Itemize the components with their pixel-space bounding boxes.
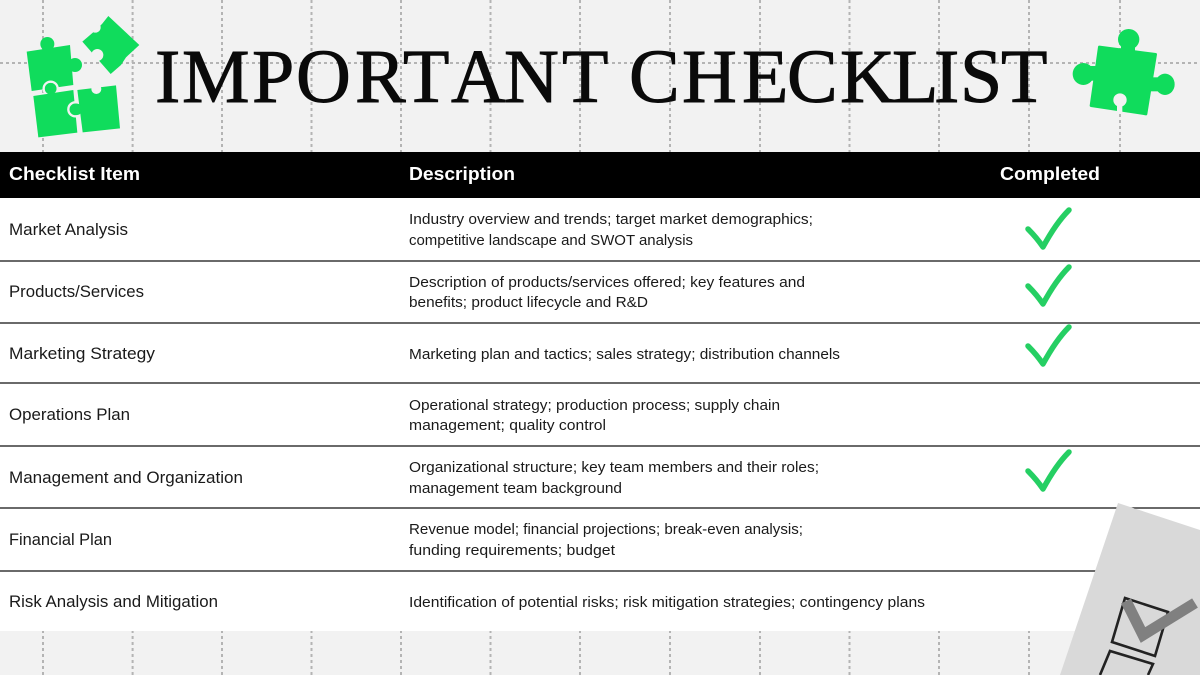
table header	[0, 152, 1200, 198]
grey check mark	[1126, 601, 1195, 635]
checkbox ticked	[1112, 598, 1168, 656]
title: IMPORTANT	[155, 35, 608, 119]
row: Financial Plan	[9, 522, 803, 559]
puzzle piece top right	[82, 16, 139, 74]
row: Market Analysis: competitive landscape and SWOT analysis	[409, 233, 693, 249]
table header: Completed	[1000, 163, 1100, 184]
icon: check mark Products/Services	[1028, 267, 1069, 304]
icon: check mark Marketing Strategy	[1028, 327, 1069, 364]
row: Products/Services: Description of products/services offered; key features and	[409, 275, 805, 291]
table header: Description	[409, 163, 515, 184]
row: Management and Organization: management team background	[409, 481, 622, 497]
row: Products/Services	[9, 275, 805, 311]
title: CHECKLIST	[629, 35, 1047, 119]
icon: check mark Market Analysis	[1028, 210, 1069, 247]
row: Market Analysis: Market Analysis	[9, 221, 128, 239]
checklist table	[0, 152, 1200, 631]
row: Operations Plan: management; quality control	[409, 418, 606, 434]
row: Marketing Strategy: Marketing Strategy	[9, 345, 156, 363]
row: Financial Plan: Revenue model; financial projections; break-even analysis;	[409, 522, 803, 538]
row: Risk Analysis and Mitigation	[9, 593, 925, 611]
row: Operations Plan: Operations Plan	[9, 406, 130, 424]
icon: puzzle pieces group	[27, 16, 139, 137]
icon: single puzzle piece	[1073, 29, 1175, 114]
row: Market Analysis: Industry overview and trends; target market demographics;	[409, 212, 813, 228]
title	[155, 35, 1047, 119]
row: Risk Analysis and Mitigation: Risk Analysis and Mitigation	[9, 593, 218, 611]
checkbox empty	[1100, 651, 1153, 675]
icon: check mark Management and Organization	[1028, 452, 1069, 489]
row: Management and Organization: Management and Organization	[9, 469, 243, 487]
row: Marketing Strategy	[9, 345, 840, 363]
row: Operations Plan: Operational strategy; production process; supply chain	[409, 398, 780, 414]
table header: Checklist Item	[9, 163, 140, 184]
row: Market Analysis	[9, 212, 813, 249]
row: Marketing Strategy: Marketing plan and tactics; sales strategy; distribution channels	[409, 347, 840, 363]
icon: paper with checkboxes	[1060, 503, 1200, 675]
row: Products/Services: benefits; product lifecycle and R&D	[409, 295, 648, 311]
row: Management and Organization	[9, 460, 819, 497]
row: Financial Plan: funding requirements; budget	[409, 543, 615, 559]
puzzle piece bottom right	[68, 84, 120, 132]
row: Risk Analysis and Mitigation: Identification of potential risks; risk mitigation strategies; contingency plans	[409, 595, 925, 611]
row: Operations Plan	[9, 398, 780, 434]
puzzle piece top left	[27, 37, 82, 91]
row: Products/Services: Products/Services	[9, 283, 144, 301]
row: Financial Plan: Financial Plan	[9, 531, 112, 549]
puzzle piece bottom left	[33, 82, 77, 137]
row: Management and Organization: Organizational structure; key team members and their roles;	[409, 460, 819, 476]
